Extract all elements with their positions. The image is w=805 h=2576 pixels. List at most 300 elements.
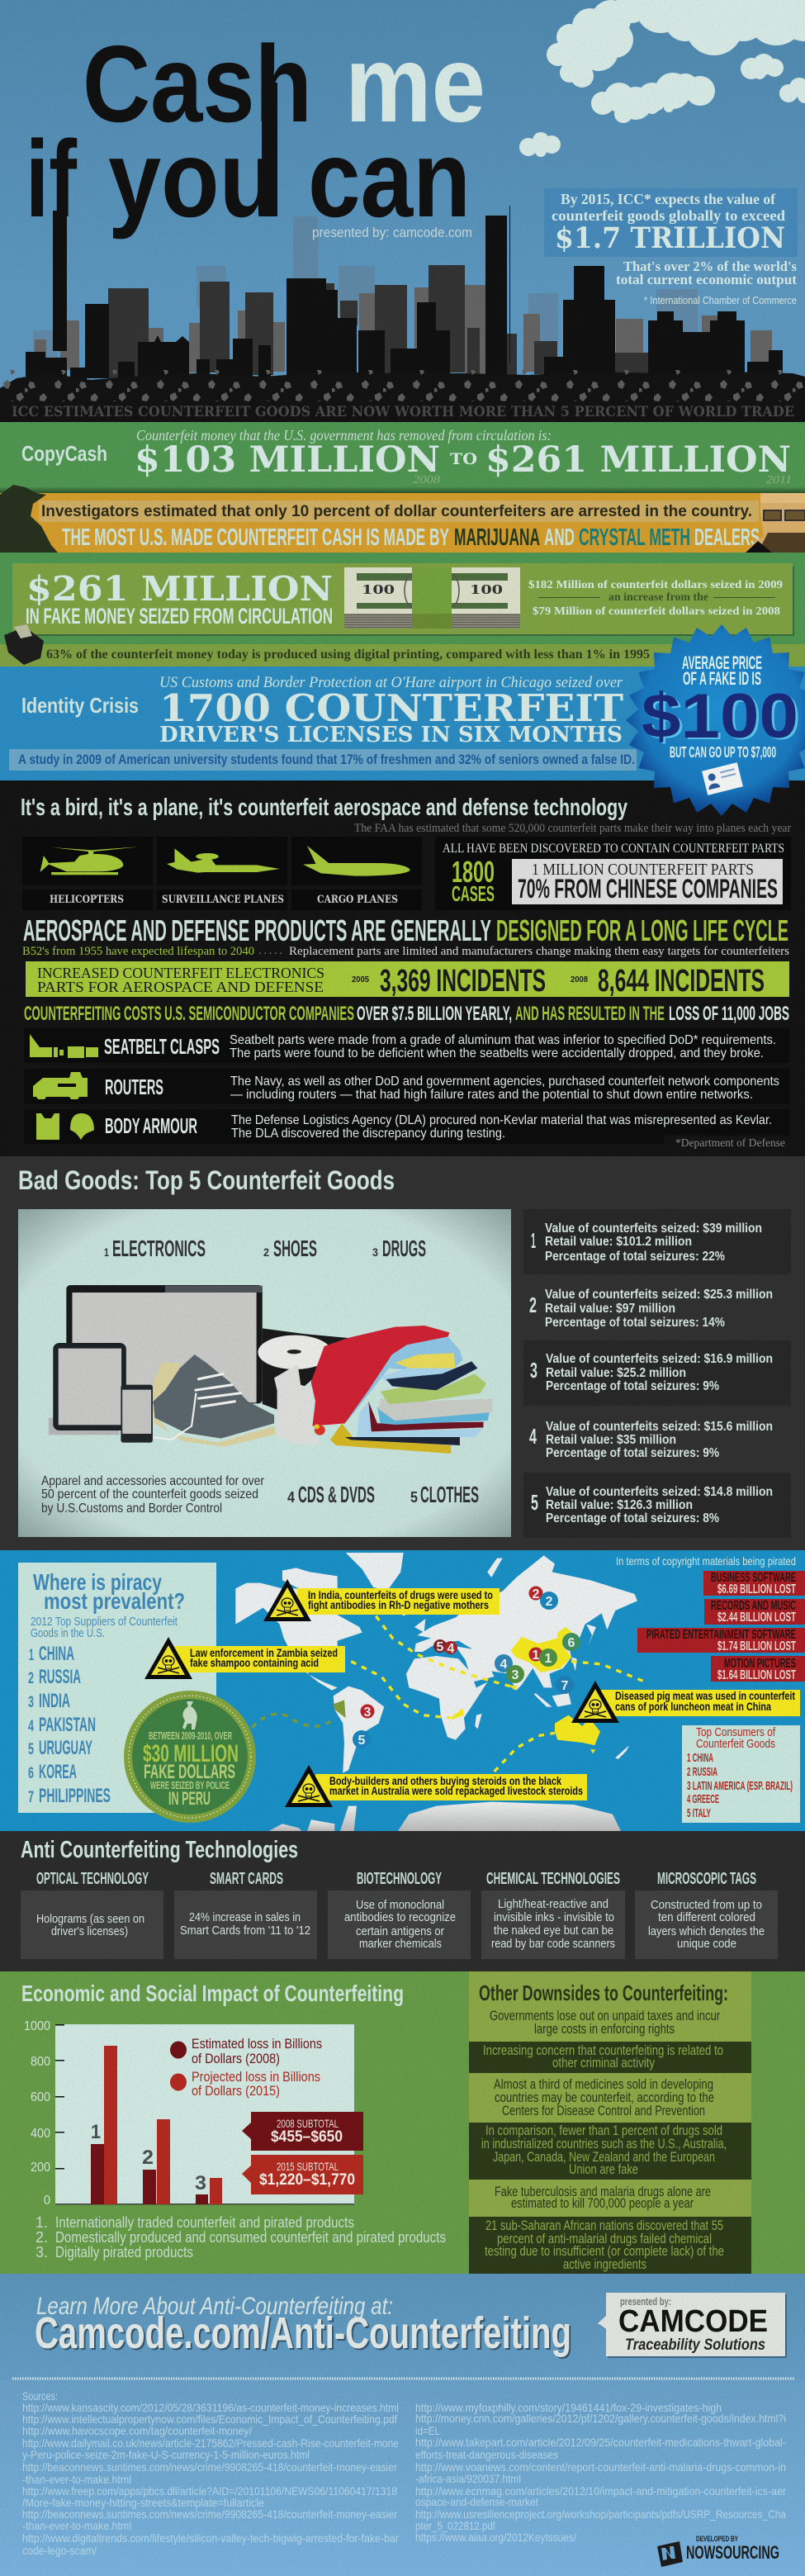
stats 1: Percentage of total seizures: 22% bbox=[545, 1250, 725, 1264]
sources: left column: http://beaconnews.suntimes.com/news/crime/9908265-418/counterfeit-money-easier bbox=[22, 2460, 397, 2474]
column: optical technology: Holograms (as seen on bbox=[36, 1912, 144, 1926]
icon: banded money stack: 100 bbox=[362, 582, 395, 597]
stats 5: Value of counterfeits seized: $14.8 million bbox=[546, 1485, 773, 1499]
bar chart: 800 bbox=[31, 2055, 50, 2069]
row: routers: ROUTERS bbox=[105, 1075, 163, 1099]
panel: other downsides: active ingredients bbox=[563, 2256, 646, 2272]
stats 4: Retail value: $35 million bbox=[546, 1433, 676, 1447]
stats 3: Retail value: $25.2 million bbox=[546, 1366, 686, 1380]
panel: top consumers: 5 ITALY bbox=[687, 1806, 711, 1820]
sources: left column bbox=[22, 2389, 399, 2557]
stats 5 bbox=[531, 1485, 773, 1525]
numbered map markers: 4 bbox=[500, 1658, 508, 1672]
product labels: 3 bbox=[372, 1245, 378, 1259]
apparel note: by U.S.Customs and Border Control bbox=[41, 1501, 222, 1516]
numbered map markers: 2 bbox=[533, 1587, 540, 1601]
panel: 261 million bbox=[12, 563, 794, 636]
footnote: *Department of Defense bbox=[675, 1137, 785, 1150]
chart legend: Estimated loss in Billions bbox=[192, 2036, 322, 2052]
panel: top consumers: Top Consumers of bbox=[696, 1725, 776, 1739]
sources: right column: http://www.myfoxphilly.com/story/19461441/fox-29-investigates-high bbox=[415, 2401, 722, 2414]
icon: banded money stack: 100 bbox=[470, 582, 503, 597]
panel: top consumers: Counterfeit Goods bbox=[696, 1737, 775, 1751]
panel: other downsides: estimated to kill 700,000 people a year bbox=[511, 2195, 694, 2211]
bar chart: 1000 bbox=[24, 2019, 50, 2033]
numbered map markers: 3 bbox=[364, 1705, 372, 1720]
product labels: CLOTHES bbox=[420, 1482, 479, 1507]
seizure comparison text bbox=[528, 579, 783, 618]
logo: Camcode: Traceability Solutions bbox=[625, 2336, 765, 2354]
panel: suppliers list: 4 bbox=[28, 1718, 34, 1735]
column: smart cards bbox=[174, 1870, 317, 1959]
heading: Economic and Social Impact of Counterfeiting bbox=[21, 1981, 404, 2006]
stat tiles bbox=[523, 1209, 791, 1538]
incidents band bbox=[26, 961, 789, 999]
column: chemical technologies: CHEMICAL TECHNOLOGIES bbox=[486, 1870, 620, 1888]
callout: Zambia shampoo: Law enforcement in Zambia seized bbox=[190, 1647, 338, 1659]
numbered map markers bbox=[353, 1586, 580, 1748]
call to action bbox=[35, 2293, 573, 2360]
chart key list: 3. bbox=[36, 2244, 48, 2261]
panel: suppliers list: 6 bbox=[28, 1765, 34, 1782]
counterfeit parts summary: 1 MILLION COUNTERFEIT PARTS bbox=[532, 861, 754, 879]
callout: 1.7 trillion: $1.7 TRILLION bbox=[555, 221, 785, 255]
numbered map markers: 6 bbox=[568, 1636, 575, 1650]
row: body armour: BODY ARMOUR bbox=[105, 1113, 197, 1138]
panel: bad goods bbox=[0, 1156, 805, 1550]
stats 3 bbox=[530, 1352, 773, 1393]
panel: suppliers list: 3 bbox=[28, 1694, 34, 1711]
chart key list: 2. bbox=[36, 2229, 48, 2246]
big figures: 2011 bbox=[766, 474, 792, 486]
panel: 261 million: $261 MILLION bbox=[26, 569, 333, 609]
subtotal 2015 tag bbox=[242, 2155, 363, 2194]
icon: seatbelt clasp bbox=[30, 1034, 98, 1058]
stats 1: Value of counterfeits seized: $39 million bbox=[545, 1222, 762, 1236]
panel: top consumers: 2 RUSSIA bbox=[687, 1765, 717, 1779]
aircraft tiles: CARGO PLANES bbox=[317, 894, 398, 906]
panel: other downsides: percent of anti-malarial drugs failed chemical bbox=[497, 2231, 712, 2246]
column: chemical technologies: invisible inks - invisible to bbox=[494, 1910, 614, 1924]
world map bbox=[235, 1553, 646, 1831]
title: Cash me if you can bbox=[26, 23, 485, 351]
callout: India drugs: In India, counterfeits of drugs were used to bbox=[308, 1589, 493, 1601]
badge: Peru seizure bbox=[124, 1691, 256, 1823]
copyright loss tiles bbox=[637, 1571, 805, 1682]
gold band bbox=[0, 486, 805, 553]
apparel note: 50 percent of the counterfeit goods seized bbox=[41, 1487, 258, 1501]
semiconductor cost line: OVER $7.5 BILLION YEARLY, bbox=[357, 1003, 512, 1025]
panel: suppliers list: PAKISTAN bbox=[39, 1714, 96, 1736]
logo: Nowsourcing: DEVELOPED BY bbox=[696, 2535, 738, 2543]
subtotal 2015 tag: $1,220–$1,770 bbox=[259, 2171, 355, 2189]
callout: 1.7 trillion: By 2015, ICC* expects the value of bbox=[561, 191, 776, 207]
sources: left column: http://www.dailymail.co.uk/news/article-2175862/Pressed-cash-Rise-counterfeit-mone bbox=[22, 2436, 399, 2450]
call to action: Learn More About Anti-Counterfeiting at: bbox=[36, 2293, 393, 2320]
stats 1 bbox=[531, 1222, 762, 1264]
panel: suppliers list: CHINA bbox=[39, 1643, 74, 1665]
gold band: MARIJUANA bbox=[454, 524, 540, 551]
apparel note: Apparel and accessories accounted for over bbox=[41, 1474, 265, 1488]
panel: other downsides: countries may be counterfeit, according to the bbox=[495, 2090, 714, 2105]
big figures bbox=[135, 439, 792, 486]
stats 3: 3 bbox=[530, 1358, 537, 1383]
numbered map markers: 3 bbox=[512, 1668, 519, 1682]
digital printing strip: 63% of the counterfeit money today is produced using digital printing, compared with less than 1% in 1995 bbox=[46, 648, 650, 662]
numbered map markers: 4 bbox=[447, 1642, 455, 1656]
row: seatbelt clasps bbox=[24, 1028, 789, 1063]
column: biotechnology: certain antigens or bbox=[356, 1924, 444, 1938]
sources: right column bbox=[415, 2401, 786, 2544]
icon: money bag and runner bbox=[182, 1701, 197, 1729]
panel: top consumers: 1 CHINA bbox=[687, 1751, 713, 1765]
panel: suppliers list: RUSSIA bbox=[39, 1666, 81, 1688]
bar chart: 0 bbox=[44, 2194, 50, 2208]
panel: suppliers list: Goods in the U.S. bbox=[31, 1626, 105, 1640]
chart key list: Domestically produced and consumed counterfeit and pirated products bbox=[55, 2229, 446, 2246]
column: smart cards: SMART CARDS bbox=[210, 1870, 283, 1888]
panel: other downsides: Fake tuberculosis and malaria drugs alone are bbox=[495, 2184, 711, 2199]
stats 1: Retail value: $101.2 million bbox=[545, 1235, 692, 1249]
numbered map markers: 2 bbox=[546, 1595, 553, 1609]
chart key list: Internationally traded counterfeit and pirated products bbox=[55, 2214, 354, 2231]
panel: aerospace and defense bbox=[0, 780, 805, 1156]
gold band: Investigators estimated that only 10 percent of dollar counterfeiters are arrested in the country. bbox=[41, 503, 752, 520]
callout: Zambia shampoo bbox=[144, 1637, 345, 1679]
sources: left column: http://www.kansascity.com/2012/05/28/3631196/as-counterfeit-money-increases.html bbox=[22, 2401, 399, 2414]
panel: 261 million: IN FAKE MONEY SEIZED FROM CIRCULATION bbox=[26, 604, 333, 629]
incidents band: 3,369 INCIDENTS bbox=[380, 964, 546, 999]
panel: other downsides bbox=[469, 1971, 751, 2274]
subtotal 2015 tag: 2015 SUBTOTAL bbox=[277, 2160, 339, 2173]
row: seatbelt clasps: Seatbelt parts were made from a grade of aluminum that was inferior to specified DoD* requirements. bbox=[230, 1033, 776, 1047]
stats 1: 1 bbox=[531, 1228, 536, 1253]
sources: left column: http://www.intellectualpropertynow.com/files/Economic_Impact_of_Counterfeiting.pdf bbox=[22, 2412, 397, 2426]
sources: right column: -africa-asia/920037.html bbox=[415, 2472, 521, 2485]
incidents band: 2005 bbox=[352, 975, 369, 984]
B52 note bbox=[22, 944, 789, 958]
callout: steroids: market in Australia were sold repackaged livestock steroids bbox=[329, 1785, 583, 1797]
column: microscopic tags bbox=[635, 1870, 778, 1959]
sources: right column: ospace-and-defense-market bbox=[415, 2495, 538, 2508]
panel: suppliers list: 1 bbox=[29, 1647, 34, 1664]
product labels: 5 bbox=[410, 1489, 418, 1506]
panel: other downsides: Centers for Disease Control and Prevention bbox=[502, 2103, 705, 2118]
panel: CopyCash bbox=[0, 422, 805, 667]
panel: other downsides: large costs in enforcing rights bbox=[534, 2021, 675, 2037]
big statement: 1700 COUNTERFEIT bbox=[159, 686, 624, 730]
clouds bbox=[519, 0, 805, 157]
column: chemical technologies bbox=[481, 1870, 625, 1959]
chart key list: 1. bbox=[36, 2214, 48, 2231]
seizure comparison text: an increase from the bbox=[608, 591, 708, 604]
student study strip: A study in 2009 of American university students found that 17% of freshmen and 32% of seniors owned a false ID. bbox=[18, 752, 635, 767]
panel: other downsides: in industrialized countries such as the U.S., Australia, bbox=[481, 2136, 727, 2151]
sources: right column: id=EL bbox=[415, 2424, 440, 2437]
panel: other downsides: Increasing concern that counterfeiting is related to bbox=[483, 2042, 723, 2058]
seizure comparison text: $79 Million of counterfeit dollars seized in 2008 bbox=[533, 605, 780, 618]
big figures: 2008 bbox=[413, 474, 440, 486]
chart legend bbox=[170, 2036, 322, 2099]
badge: Peru seizure: $30 MILLION bbox=[143, 1740, 239, 1767]
gold band: CRYSTAL METH bbox=[579, 524, 690, 551]
column: optical technology bbox=[21, 1870, 163, 1959]
callout: India drugs bbox=[263, 1579, 500, 1621]
product labels: 2 bbox=[263, 1245, 269, 1259]
subtotal 2008 tag: $455–$650 bbox=[271, 2128, 343, 2146]
callout: 1.7 trillion bbox=[544, 188, 798, 257]
badge: Peru seizure: WERE SEIZED BY POLICE bbox=[150, 1779, 230, 1791]
panel: other downsides: In comparison, fewer than 1 percent of drugs sold bbox=[485, 2123, 722, 2138]
numbered map markers: 5 bbox=[437, 1640, 444, 1654]
B52 note: ..... bbox=[258, 944, 284, 957]
big figures: $261 MILLION bbox=[485, 439, 791, 481]
column: chemical technologies: read by bar code scanners bbox=[491, 1937, 615, 1951]
stats 5: Retail value: $126.3 million bbox=[546, 1498, 693, 1512]
bar chart: 400 bbox=[31, 2127, 50, 2141]
digital printing strip bbox=[0, 624, 805, 667]
badge: average price of a fake ID bbox=[626, 624, 805, 816]
numbered map markers: 1 bbox=[545, 1652, 552, 1666]
panel: suppliers list: 2012 Top Suppliers of Counterfeit bbox=[31, 1615, 178, 1629]
dotted connectors bbox=[252, 1616, 646, 1772]
panel: top consumers: 4 GREECE bbox=[687, 1792, 719, 1806]
bar chart bbox=[24, 2019, 363, 2208]
stats 2: 2 bbox=[529, 1293, 537, 1317]
product labels: 4 bbox=[287, 1489, 295, 1506]
panel: anti counterfeiting technologies bbox=[0, 1831, 805, 1971]
ground with foliage bbox=[0, 370, 805, 423]
stats 5: Percentage of total seizures: 8% bbox=[546, 1511, 719, 1525]
icons: helicopter, surveillance plane, cargo plane bbox=[40, 846, 410, 876]
panel: piracy map bbox=[0, 1550, 805, 1831]
product labels: SHOES bbox=[273, 1236, 317, 1261]
icon: ID card bbox=[702, 762, 743, 795]
sources panel bbox=[0, 2379, 805, 2576]
callout: Zambia shampoo: fake shampoo containing acid bbox=[190, 1657, 319, 1669]
sources: left column: /More-fake-money-hitting-streets&template=fullarticle bbox=[22, 2496, 264, 2509]
row: routers: — including routers — that had high failure rates and the potential to shut down entire networks. bbox=[230, 1088, 753, 1102]
stats 4: 4 bbox=[529, 1424, 537, 1449]
logo: Camcode: presented by: bbox=[620, 2295, 671, 2308]
stats 2: Value of counterfeits seized: $25.3 million bbox=[545, 1288, 773, 1302]
stats 4: Percentage of total seizures: 9% bbox=[546, 1446, 719, 1460]
title: Cash me if you can: Cash bbox=[83, 23, 312, 145]
title: Cash me if you can: you bbox=[108, 118, 277, 240]
numbered map markers: 5 bbox=[358, 1734, 366, 1748]
title: Cash me if you can: me bbox=[345, 23, 485, 145]
chart legend: of Dollars (2015) bbox=[192, 2083, 280, 2099]
illustration: electronics, shoe, cd, bottle, clothes bbox=[49, 1285, 492, 1454]
chart key list bbox=[36, 2214, 446, 2261]
sources: left column: code-lego-scam/ bbox=[22, 2544, 97, 2557]
logo: Camcode: CAMCODE bbox=[618, 2304, 768, 2339]
panel: suppliers list: INDIA bbox=[39, 1690, 70, 1712]
sources: left column: -than-ever-to-make.html bbox=[22, 2519, 131, 2532]
B52 note: B52's from 1955 have expected lifespan to 2040 bbox=[22, 945, 254, 958]
column: optical technology: OPTICAL TECHNOLOGY bbox=[36, 1870, 149, 1888]
call to action: Camcode.com/Anti-Counterfeiting bbox=[35, 2308, 571, 2358]
title: Cash me if you can: can bbox=[308, 118, 471, 240]
product labels: 1 bbox=[104, 1245, 109, 1259]
column: biotechnology: Use of monoclonal bbox=[356, 1898, 444, 1912]
badge: Peru seizure: FAKE DOLLARS bbox=[144, 1761, 235, 1783]
stats 3: Value of counterfeits seized: $16.9 million bbox=[546, 1352, 773, 1366]
sources: right column: pter_5_022812.pdf bbox=[415, 2519, 495, 2532]
panel: suppliers list: most prevalent? bbox=[44, 1588, 185, 1614]
stats 2 bbox=[529, 1288, 773, 1330]
badge: average price of a fake ID: $100 bbox=[642, 681, 798, 752]
panel: other downsides: testing due to insufficient (or complete lack) of the bbox=[485, 2243, 724, 2259]
panel: Identity Crisis bbox=[0, 667, 805, 780]
panel: suppliers list: URUGUAY bbox=[39, 1737, 92, 1759]
seizure comparison text: $182 Million of counterfeit dollars seized in 2009 bbox=[528, 579, 783, 591]
aircraft tiles: SURVEILLANCE PLANES bbox=[162, 894, 284, 906]
callout: pig meat bbox=[571, 1681, 800, 1723]
callout: steroids: Body-builders and others buying steroids on the black bbox=[329, 1775, 561, 1787]
title: Cash me if you can: if bbox=[26, 118, 78, 240]
icon: silhouette in hat bbox=[0, 485, 58, 553]
heading: Anti Counterfeiting Technologies bbox=[21, 1837, 298, 1863]
counterfeit parts summary bbox=[435, 837, 791, 910]
column: smart cards: Smart Cards from '11 to '12 bbox=[180, 1924, 310, 1938]
icon: banded money stack bbox=[344, 567, 520, 629]
badge: Peru seizure: IN PERU bbox=[168, 1788, 211, 1809]
semiconductor cost line: AND HAS RESULTED IN THE bbox=[515, 1003, 665, 1025]
icon: man with glasses bbox=[746, 493, 805, 553]
sources: left column: http://www.digitaltrends.com/lifestyle/silicon-valley-tech-bigwig-arrested-for-fake-bar bbox=[22, 2531, 399, 2545]
callout: India drugs: fight antibodies in Rh-D negative mothers bbox=[308, 1599, 489, 1611]
incidents band: PARTS FOR AEROSPACE AND DEFENSE bbox=[37, 979, 324, 995]
stats 2: Retail value: $97 million bbox=[545, 1302, 675, 1316]
footnote bbox=[664, 1136, 791, 1152]
bar chart: 3 bbox=[195, 2172, 206, 2194]
aircraft tiles bbox=[22, 837, 422, 910]
column: biotechnology: antibodies to recognize bbox=[344, 1910, 456, 1924]
column: microscopic tags: Constructed from up to bbox=[651, 1898, 762, 1912]
product labels: DRUGS bbox=[382, 1236, 426, 1261]
panel: other downsides: other criminal activity bbox=[552, 2055, 655, 2071]
sources: left column: http://beaconnews.suntimes.com/news/crime/9908265-418/counterfeit-money-easier bbox=[22, 2507, 397, 2521]
economic output note: total current economic output bbox=[616, 272, 797, 287]
bar chart: 600 bbox=[31, 2090, 50, 2104]
column: microscopic tags: unique code bbox=[677, 1937, 736, 1951]
sources: left column: Sources: bbox=[22, 2389, 58, 2403]
row: routers bbox=[24, 1069, 789, 1104]
product labels: CDS & DVDS bbox=[298, 1482, 375, 1507]
product labels bbox=[104, 1236, 479, 1507]
panel: other downsides: Union are fake bbox=[569, 2161, 638, 2177]
gold band: THE MOST U.S. MADE COUNTERFEIT CASH IS MADE BY bbox=[62, 524, 449, 551]
badge: average price of a fake ID: $100 bbox=[644, 683, 801, 753]
callout: pig meat: cans of pork luncheon meat in China bbox=[615, 1701, 771, 1713]
column: chemical technologies: the naked eye but can be bbox=[494, 1924, 613, 1938]
column: chemical technologies: Light/heat-reactive and bbox=[498, 1897, 608, 1911]
bar chart: 1 bbox=[91, 2121, 101, 2143]
product labels: ELECTRONICS bbox=[112, 1236, 206, 1261]
panel: suppliers list bbox=[18, 1563, 216, 1813]
stats 3: Percentage of total seizures: 9% bbox=[546, 1379, 719, 1393]
counterfeit parts summary: CASES bbox=[452, 881, 495, 906]
subtotal 2008 tag: 2008 SUBTOTAL bbox=[277, 2117, 339, 2130]
row: body armour: The DLA discovered the discrepancy during testing. bbox=[231, 1127, 505, 1141]
sources: right column: efforts-treat-dangerous-diseases bbox=[415, 2448, 558, 2461]
call to action: Camcode.com/Anti-Counterfeiting bbox=[36, 2310, 573, 2360]
stats 2: Percentage of total seizures: 14% bbox=[545, 1316, 725, 1330]
column: biotechnology bbox=[328, 1870, 471, 1959]
column: biotechnology: BIOTECHNOLOGY bbox=[357, 1870, 442, 1888]
panel: hero bbox=[0, 0, 805, 423]
callout: 1.7 trillion: counterfeit goods globally to exceed bbox=[552, 207, 785, 224]
panel: suppliers list: KOREA bbox=[39, 1761, 77, 1783]
big statement: DRIVER'S LICENSES IN SIX MONTHS bbox=[159, 723, 623, 747]
column: microscopic tags: layers which denotes the bbox=[648, 1924, 765, 1938]
big statement bbox=[159, 686, 624, 747]
panel: top consumers bbox=[682, 1725, 800, 1823]
student study strip bbox=[9, 749, 637, 771]
apparel note bbox=[41, 1474, 265, 1516]
sources: right column: https://www.aiaa.org/2012KeyIssues/ bbox=[415, 2531, 576, 2544]
presented by: presented by: camcode.com bbox=[312, 225, 472, 240]
panel: suppliers list: Where is piracy bbox=[33, 1569, 162, 1595]
column: smart cards: 24% increase in sales in bbox=[189, 1910, 301, 1924]
panel: suppliers list: 7 bbox=[28, 1789, 34, 1806]
sources: left column: http://www.freep.com/apps/pbcs.dll/article?AID=/20101106/NEWS06/11060417/1318 bbox=[22, 2484, 397, 2498]
panel: suppliers list: PHILIPPINES bbox=[39, 1785, 111, 1807]
numbered map markers: 1 bbox=[533, 1649, 540, 1663]
chart legend: of Dollars (2008) bbox=[192, 2051, 280, 2066]
column: microscopic tags: ten different colored bbox=[658, 1910, 755, 1924]
big figures: $103 MILLION bbox=[135, 439, 440, 481]
B52 note: Replacement parts are limited and manufacturers change making them easy targets for counterfeiters bbox=[289, 945, 789, 958]
logo: Camcode bbox=[598, 2293, 787, 2358]
bar chart: 200 bbox=[31, 2161, 50, 2175]
intro line: US Customs and Border Protection at O'Hare airport in Chicago seized over bbox=[159, 674, 623, 691]
heading: CopyCash: CopyCash bbox=[21, 441, 107, 466]
stats 4: Value of counterfeits seized: $15.6 million bbox=[546, 1420, 773, 1434]
panel: other downsides: Governments lose out on unpaid taxes and incur bbox=[490, 2008, 720, 2023]
gold band: AND bbox=[544, 524, 575, 551]
economic output note: That's over 2% of the world's bbox=[623, 259, 797, 274]
stats 5: 5 bbox=[531, 1490, 538, 1515]
big figures: TO bbox=[450, 450, 477, 468]
chart legend: Projected loss in Billions bbox=[192, 2069, 320, 2085]
semiconductor cost line: COUNTERFEITING COSTS U.S. SEMICONDUCTOR COMPANIES bbox=[24, 1003, 354, 1025]
logo: Nowsourcing bbox=[657, 2535, 779, 2567]
icon: printer bbox=[4, 624, 44, 665]
heading: Identity Crisis bbox=[21, 693, 139, 718]
column: biotechnology: marker chemicals bbox=[359, 1937, 442, 1951]
panel: suppliers list: 5 bbox=[28, 1741, 34, 1758]
heading: Bad Goods: Top 5 Counterfeit Goods bbox=[18, 1165, 395, 1195]
chart key list: Digitally pirated products bbox=[55, 2244, 193, 2261]
column: optical technology: driver's licenses) bbox=[51, 1924, 128, 1938]
intro line: Counterfeit money that the U.S. government has removed from circulation is: bbox=[136, 427, 552, 444]
subtotal 2008 tag bbox=[242, 2112, 363, 2151]
aircraft tiles: HELICOPTERS bbox=[50, 894, 124, 906]
icon: router bbox=[33, 1072, 88, 1099]
panel: other downsides: 21 sub-Saharan African nations discovered that 55 bbox=[485, 2218, 723, 2233]
sources: left column: y-Peru-police-seize-2m-fake-U-S-currency-1-5-million-euros.html bbox=[22, 2448, 310, 2461]
panel: economic and social impact bbox=[0, 1971, 805, 2274]
counterfeit parts summary: 1800 bbox=[452, 855, 495, 889]
row: seatbelt clasps: SEATBELT CLASPS bbox=[104, 1034, 220, 1059]
incidents band: INCREASED COUNTERFEIT ELECTRONICS bbox=[37, 965, 324, 981]
panel: goods illustration bbox=[18, 1209, 511, 1537]
sources: left column: -than-ever-to-make.html bbox=[22, 2473, 131, 2486]
skyline bbox=[26, 206, 783, 382]
sources: left column: http://www.havocscope.com/tag/counterfeit-money/ bbox=[22, 2424, 252, 2437]
